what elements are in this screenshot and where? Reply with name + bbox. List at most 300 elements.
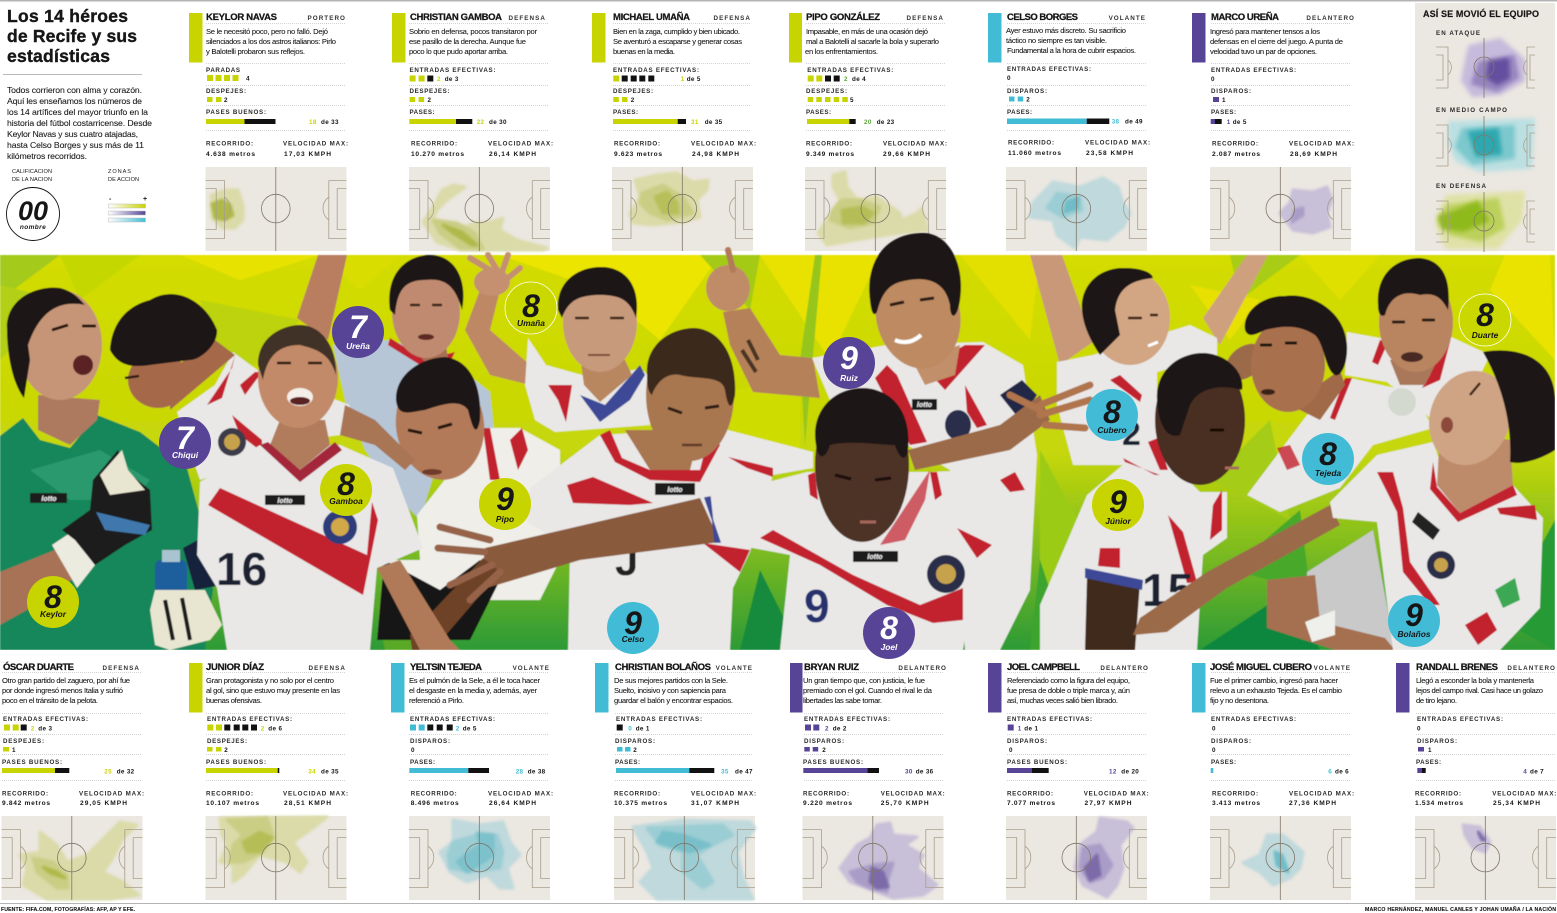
rating: Keylor 8: [27, 576, 79, 628]
panel: Joel Campbell: 27,97 KMPH: [1084, 800, 1132, 807]
white band below collage: [0, 650, 1557, 662]
rating: Duarte 8: [1459, 294, 1511, 346]
authors credit: MARCO HERNÁNDEZ, MANUEL CANLES Y JOHAN UMAÑA / LA NACIÓN: [1365, 905, 1556, 913]
player: Gamboa, number 16: lotto: [277, 498, 293, 505]
heat map: Keylor Navas: [206, 167, 346, 251]
panel: José Miguel Cubero: VELOCIDAD MAX:: [1289, 790, 1354, 798]
panel: Christian Gamboa: 2: [428, 97, 432, 104]
panel: Pipo González: 5: [850, 97, 854, 104]
panel: Christian Gamboa: CHRISTIAN GAMBOA: [410, 12, 502, 23]
panel: Randall Brenes: DELANTERO: [1507, 665, 1556, 672]
panel: Michael Umaña: 31: [691, 119, 699, 126]
legend: zonas de acción: ZONAS: [108, 169, 131, 175]
panel: Bryan Ruiz: 30: [905, 768, 913, 776]
panel: José Miguel Cubero: 0: [1212, 747, 1216, 754]
panel: Christian Bolaños: de 1: [636, 726, 650, 732]
panel: Bryan Ruiz: RECORRIDO:: [803, 790, 849, 798]
player: Umaña, raised arm: [465, 255, 650, 432]
panel: Bryan Ruiz: BRYAN RUIZ: [804, 662, 859, 673]
panel: Marco Ureña: DELANTERO: [1306, 15, 1355, 22]
panel: Óscar Duarte: ÓSCAR DUARTE: [3, 661, 74, 673]
legend: zonas de acción: -: [109, 196, 112, 203]
panel: Celso Borges: 0: [1007, 75, 1011, 82]
player: Gamboa, number 16: [197, 325, 460, 650]
panel: José Miguel Cubero: DISPAROS:: [1211, 738, 1251, 745]
panel: Randall Brenes: RANDALL BRENES: [1416, 662, 1498, 673]
heat map: José Miguel Cubero: [1210, 816, 1351, 900]
heat map: Junior Díaz: [206, 816, 346, 900]
rating: Chiqui 7: [159, 417, 211, 469]
panel: Michael Umaña: 2: [631, 97, 635, 104]
panel: Junior Díaz: 34: [308, 768, 316, 776]
panel: Michael Umaña: Se aventuró a escaparse y generar cosas: [613, 37, 742, 46]
heat map: Joel Campbell: [1006, 816, 1147, 900]
panel: Junior Díaz: RECORRIDO:: [206, 790, 253, 798]
panel: Celso Borges: 2: [1026, 96, 1030, 104]
panel: Randall Brenes: lejos del campo rival. Casi hace un golazo: [1416, 686, 1543, 695]
panel: Marco Ureña: velocidad tuvo un par de opciones.: [1210, 47, 1317, 56]
panel: Keylor Navas: de 33: [321, 119, 339, 126]
panel: Celso Borges: [988, 12, 1150, 251]
team map: en defensa: [1436, 183, 1535, 252]
panel: Michael Umaña: DEFENSA: [714, 15, 751, 22]
rating: Bolaños 9: 9: [1405, 597, 1423, 633]
intro text: hasta Celso Borges y sus más de 11: [7, 140, 144, 150]
panel: Keylor Navas: 18: [309, 119, 317, 126]
player: Keylor Navas, goalkeeper: [0, 288, 222, 650]
panel: Michael Umaña: 9.623 metros: [614, 151, 662, 158]
player: Bolaños, black bandana: [1133, 350, 1555, 650]
panel: Junior Díaz: PASES BUENOS:: [206, 759, 266, 766]
panel: José Miguel Cubero: RECORRIDO:: [1212, 790, 1258, 798]
panel: Randall Brenes: [1396, 662, 1556, 900]
player: Cubero, arms raised: [1030, 255, 1268, 465]
player: Gamboa, number 16: 16: [216, 543, 267, 595]
panel: Óscar Duarte: de 3: [38, 726, 52, 732]
panel: Celso Borges: VELOCIDAD MAX:: [1085, 140, 1150, 146]
panel: Celso Borges: VOLANTE: [1109, 15, 1146, 22]
panel: Christian Gamboa: RECORRIDO:: [411, 140, 457, 148]
heat map: Bryan Ruiz: [802, 816, 944, 900]
panel: Yeltsin Tejeda: 8.496 metros: [411, 800, 459, 807]
panel: Christian Gamboa: de 30: [489, 119, 507, 126]
player: Joel Campbell: 9: [804, 580, 830, 632]
team map: en ataque: EN ATAQUE: [1436, 30, 1480, 37]
panel: Randall Brenes: 25,34 KMPH: [1493, 800, 1540, 807]
panel: Michael Umaña: de 35: [705, 119, 723, 126]
panel: Yeltsin Tejeda: YELTSIN TEJEDA: [410, 662, 482, 673]
panel: Joel Campbell: 12: [1109, 768, 1117, 776]
panel: Joel Campbell: DISPAROS:: [1007, 738, 1047, 745]
panel: Junior Díaz: VELOCIDAD MAX:: [283, 790, 348, 798]
panel: Pipo González: de 4: [852, 76, 866, 83]
panel: Michael Umaña: Bien en la zaga, cumplido y bien ubicado.: [613, 27, 740, 36]
panel: Junior Díaz: 10.107 metros: [206, 800, 259, 807]
title: Los 14 héroes: [7, 6, 128, 26]
panel: José Miguel Cubero: VOLANTE: [1314, 665, 1351, 672]
rating: Ruiz 9: [823, 337, 875, 389]
panel: Óscar Duarte: PASES BUENOS:: [2, 759, 62, 766]
heat map: Marco Ureña: [1210, 167, 1351, 251]
panel: así se movió el equipo: [1415, 3, 1555, 252]
panel: Celso Borges: Ayer estuvo más discreto. Su sacrificio: [1006, 26, 1126, 35]
panel: Christian Gamboa: PASES:: [410, 109, 434, 116]
panel: Pipo González: ENTRADAS EFECTIVAS:: [807, 67, 893, 74]
panel: José Miguel Cubero: [1192, 662, 1354, 900]
panel: Christian Bolaños: [595, 662, 756, 900]
panel: Óscar Duarte: de 32: [117, 768, 135, 776]
panel: Junior Díaz: [189, 662, 348, 900]
player: Keylor Navas, goalkeeper: lotto: [41, 496, 57, 503]
panel: Christian Bolaños: de 47: [735, 768, 753, 776]
heat map: Celso Borges: [1006, 167, 1147, 251]
panel: Christian Gamboa: de 3: [445, 76, 459, 83]
panel: Joel Campbell: [988, 662, 1149, 900]
panel: Pipo González: VELOCIDAD MAX:: [883, 140, 947, 148]
panel: Junior Díaz: DESPEJES:: [207, 738, 247, 745]
panel: Keylor Navas: 4: [246, 76, 250, 82]
rating: Tejeda 8: Tejeda: [1315, 468, 1341, 478]
panel: Bryan Ruiz: 25,70 KMPH: [881, 800, 929, 807]
panel: Junior Díaz: DEFENSA: [309, 665, 346, 672]
panel: Bryan Ruiz: DISPAROS:: [804, 738, 844, 745]
panel: Michael Umaña: 24,98 KMPH: [692, 151, 739, 158]
rating: Keylor 8: 8: [44, 579, 62, 615]
panel: Yeltsin Tejeda: 0: [411, 747, 415, 754]
panel: Pipo González: 20: [864, 119, 872, 126]
panel: Keylor Navas: 4.638 metros: [206, 151, 255, 158]
panel: Christian Bolaños: 2: [633, 747, 637, 754]
rating: Celso 9: Celso: [622, 634, 644, 644]
panel: Christian Bolaños: 0: [628, 726, 632, 732]
panel: Keylor Navas: [189, 12, 348, 251]
player: Junior Díaz, number 15: 15: [1142, 564, 1193, 616]
panel: Marco Ureña: [1192, 12, 1355, 251]
rating: Júnior 9: Júnior: [1105, 516, 1132, 526]
heat map: Christian Gamboa: [409, 167, 550, 251]
panel: Celso Borges: ENTRADAS EFECTIVAS:: [1007, 66, 1091, 73]
rating: Cubero 8: 8: [1103, 394, 1121, 430]
panel: Joel Campbell: 1: [1018, 726, 1022, 732]
panel: Bryan Ruiz: ENTRADAS EFECTIVAS:: [804, 716, 890, 723]
player: Celso Borges: [527, 328, 813, 650]
panel: Óscar Duarte: ENTRADAS EFECTIVAS:: [3, 716, 88, 723]
legend: zonas de acción: DE ACCION: [108, 177, 139, 183]
rating: Ruiz 9: Ruiz: [840, 373, 859, 383]
panel: Randall Brenes: DISPAROS:: [1417, 738, 1457, 745]
panel: Celso Borges: DISPAROS:: [1007, 88, 1047, 95]
legend: calificación: CALIFICACION: [12, 169, 52, 175]
panel: José Miguel Cubero: fijo y no desentona.: [1210, 696, 1269, 705]
panel: Christian Gamboa: 10.270 metros: [411, 151, 464, 158]
panel: Junior Díaz: 28,51 KMPH: [284, 800, 331, 807]
player: Junior Díaz, number 15: [1040, 353, 1245, 650]
panel: Junior Díaz: de 6: [268, 726, 282, 732]
panel: Óscar Duarte: por donde ingresó menos Italia y sufrió: [2, 686, 123, 695]
source credit: FUENTE: FIFA.COM, FOTOGRAFÍAS: AFP, AP Y EFE.: [1, 905, 136, 913]
rating: Pipo 9: Pipo: [496, 514, 514, 524]
panel: Bryan Ruiz: de 36: [916, 768, 934, 776]
panel: Marco Ureña: 28,69 KMPH: [1290, 151, 1337, 158]
legend: calificación: DE LA NACION: [12, 177, 52, 183]
panel: Keylor Navas: DESPEJES:: [206, 88, 246, 95]
panel: Junior Díaz: de 35: [321, 768, 339, 776]
panel: Óscar Duarte: 1: [12, 747, 16, 754]
rating: Chiqui 7: Chiqui: [172, 450, 199, 460]
panel: Yeltsin Tejeda: referenció a Pirlo.: [409, 696, 464, 705]
panel: Junior Díaz: JUNIOR DÍAZ: [206, 662, 264, 673]
panel: Keylor Navas: 2: [224, 97, 228, 104]
panel: Joel Campbell: de 1: [1024, 726, 1038, 732]
panel: José Miguel Cubero: 0: [1212, 726, 1216, 732]
player: Ruiz: lotto: [917, 402, 933, 409]
panel: Michael Umaña: DESPEJES:: [613, 88, 653, 95]
panel: Randall Brenes: Llegó a esconder la bola y mantenerla: [1416, 676, 1535, 685]
panel: Celso Borges: 23,58 KMPH: [1086, 150, 1133, 157]
panel: Bryan Ruiz: PASES BUENOS:: [803, 759, 863, 766]
panel: Yeltsin Tejeda: VELOCIDAD MAX:: [488, 790, 553, 798]
player: Joel Campbell: [410, 385, 1090, 650]
panel: José Miguel Cubero: PASES:: [1211, 759, 1236, 766]
panel: Joel Campbell: VELOCIDAD MAX:: [1084, 790, 1149, 798]
panel: Yeltsin Tejeda: [391, 662, 553, 900]
panel: Bryan Ruiz: Un gran tiempo que, con justicia, le fue: [803, 676, 925, 685]
panel: Pipo González: 2: [844, 76, 848, 83]
intro text: kilómetros recorridos.: [7, 151, 87, 161]
legend: calificación: [6, 169, 60, 240]
panel: Marco Ureña: ENTRADAS EFECTIVAS:: [1211, 67, 1296, 74]
panel: Marco Ureña: PASES:: [1211, 109, 1236, 116]
panel: Keylor Navas: KEYLOR NAVAS: [206, 12, 277, 23]
panel: Michael Umaña: 1: [681, 76, 685, 83]
player: Chiqui, curly hair: [110, 294, 350, 480]
rating: Gamboa 8: Gamboa: [329, 496, 363, 506]
player: Ureña, behind: [297, 255, 495, 520]
panel: Junior Díaz: 2: [261, 726, 265, 732]
panel: Joel Campbell: DELANTERO: [1100, 665, 1149, 672]
rating: Celso 9: [607, 602, 659, 654]
rating: Bolaños 9: Bolaños: [1397, 629, 1431, 639]
panel: Christian Bolaños: 31,07 KMPH: [691, 800, 739, 807]
panel: Bryan Ruiz: libertades las sabe tomar.: [803, 696, 882, 705]
panel: Pipo González: [789, 12, 947, 251]
panel: Yeltsin Tejeda: ENTRADAS EFECTIVAS:: [410, 716, 495, 723]
panel: Keylor Navas: PARADAS: [206, 67, 240, 74]
panel: Christian Gamboa: ese pasillo de la derecha. Aunque fue: [409, 37, 526, 46]
panel: Marco Ureña: de 5: [1233, 119, 1247, 126]
panel: Randall Brenes: 4: [1523, 768, 1527, 776]
intro text: Keylor Navas y sus cuatro atajadas,: [7, 129, 138, 139]
panel: José Miguel Cubero: 27,36 KMPH: [1289, 800, 1336, 807]
panel: Marco Ureña: MARCO UREÑA: [1211, 12, 1279, 23]
panel: Marco Ureña: 2.087 metros: [1212, 151, 1260, 158]
panel: José Miguel Cubero: Fue el primer cambio, ingresó para hacer: [1210, 676, 1338, 685]
panel: José Miguel Cubero: ENTRADAS EFECTIVAS:: [1211, 716, 1296, 723]
panel: Christian Gamboa: 2: [437, 76, 441, 83]
intro text: Aquí les enseñamos los números de: [7, 96, 142, 106]
panel: Pipo González: DESPEJES:: [806, 88, 847, 95]
panel: Joel Campbell: Referenciado como la figura del equipo,: [1007, 676, 1130, 685]
rating: Pipo 9: [479, 478, 531, 530]
panel: Joel Campbell: ENTRADAS EFECTIVAS:: [1007, 716, 1092, 723]
panel: Christian Bolaños: ENTRADAS EFECTIVAS:: [616, 716, 702, 723]
panel: Michael Umaña: buenas en la media.: [613, 47, 675, 56]
panel: José Miguel Cubero: JOSÉ MIGUEL CUBERO: [1210, 662, 1312, 673]
panel: Christian Bolaños: guardar el balón y encontrar espacios.: [614, 696, 733, 705]
panel: Pipo González: PIPO GONZÁLEZ: [806, 12, 880, 23]
panel: Keylor Navas: 17,03 KMPH: [284, 151, 331, 158]
panel: Michael Umaña: VELOCIDAD MAX:: [691, 140, 756, 148]
heat map: Randall Brenes: [1415, 816, 1556, 900]
panel: Pipo González: de 23: [877, 119, 895, 126]
panel: Yeltsin Tejeda: PASES:: [410, 759, 435, 766]
rating: Júnior 9: 9: [1109, 484, 1127, 520]
player: Celso Borges: lotto: [667, 487, 683, 494]
panel: Yeltsin Tejeda: DISPAROS:: [410, 738, 450, 745]
panel: Michael Umaña: RECORRIDO:: [614, 140, 660, 148]
panel: Óscar Duarte: poco en el tránsito de la pelota.: [2, 696, 98, 705]
panel: Yeltsin Tejeda: 26,64 KMPH: [489, 800, 536, 807]
top rule: [0, 0, 1557, 2]
panel: Óscar Duarte: 9.842 metros: [2, 800, 50, 807]
panel: Bryan Ruiz: [790, 662, 947, 900]
panel: Marco Ureña: RECORRIDO:: [1212, 140, 1258, 148]
panel: Óscar Duarte: VELOCIDAD MAX:: [79, 790, 144, 798]
panel: Pipo González: DEFENSA: [907, 15, 944, 22]
player: Duarte: [1345, 258, 1490, 422]
panel: Bryan Ruiz: VELOCIDAD MAX:: [881, 790, 945, 798]
panel: Christian Gamboa: DEFENSA: [509, 15, 546, 22]
title: de Recife y sus: [7, 26, 137, 46]
rating: Umaña 8: [505, 282, 557, 334]
rating: Ureña 7: 7: [349, 309, 369, 345]
rating: Ureña 7: [332, 306, 384, 358]
panel: Michael Umaña: PASES:: [613, 109, 638, 116]
panel: Christian Gamboa: [392, 12, 553, 251]
panel: Joel Campbell: así, muchas veces salió bien librado.: [1007, 696, 1118, 705]
panel: Marco Ureña: 0: [1211, 76, 1215, 83]
legend: zonas de acción: +: [143, 196, 147, 203]
panel: Joel Campbell: JOEL CAMPBELL: [1007, 662, 1080, 673]
panel: Christian Bolaños: PASES:: [615, 759, 640, 766]
panel: Yeltsin Tejeda: de 5: [463, 726, 477, 732]
rating: Duarte 8: 8: [1476, 297, 1494, 333]
panel: así se movió el equipo: ASÍ SE MOVIÓ EL EQUIPO: [1423, 8, 1539, 19]
panel: Keylor Navas: PORTERO: [308, 15, 346, 22]
panel: Joel Campbell: PASES BUENOS:: [1007, 759, 1067, 766]
legend: calificación: nombre: [20, 224, 46, 231]
panel: Marco Ureña: DISPAROS:: [1211, 88, 1251, 95]
panel: José Miguel Cubero: 6: [1328, 768, 1332, 776]
panel: Marco Ureña: 1: [1222, 97, 1226, 104]
rating: Celso 9: 9: [624, 605, 642, 641]
panel: Yeltsin Tejeda: 2: [456, 726, 460, 732]
intro text: los 14 artífices del mayor triunfo en la: [7, 107, 148, 117]
panel: Michael Umaña: ENTRADAS EFECTIVAS:: [613, 67, 699, 74]
panel: Joel Campbell: RECORRIDO:: [1007, 790, 1053, 798]
rating: Bolaños 9: [1388, 595, 1440, 647]
panel: Keylor Navas: RECORRIDO:: [206, 140, 253, 148]
intro text: [7, 85, 152, 161]
panel: Óscar Duarte: 25: [104, 768, 112, 776]
panel: Keylor Navas: silenciados a los dos astros italianos: Pirlo: [206, 37, 336, 46]
rating: Tejeda 8: 8: [1319, 436, 1337, 472]
panel: Yeltsin Tejeda: RECORRIDO:: [411, 790, 457, 798]
rating: Umaña 8: Umaña: [517, 318, 545, 328]
background: low-poly green and yellow: [0, 255, 1555, 650]
rating: Gamboa 8: 8: [337, 466, 355, 502]
rating: Cubero 8: [1086, 389, 1138, 441]
panel: Randall Brenes: ENTRADAS EFECTIVAS:: [1417, 716, 1503, 723]
panel: Bryan Ruiz: DELANTERO: [898, 665, 947, 672]
panel: Randall Brenes: 1: [1428, 747, 1432, 754]
panel: Randall Brenes: RECORRIDO:: [1415, 790, 1461, 798]
panel: Pipo González: Impasable, en más de una ocasión dejó: [806, 27, 928, 36]
player: Tejeda: [1219, 295, 1433, 650]
legend: calificación: 00: [18, 196, 48, 226]
panel: Bryan Ruiz: 9.220 metros: [803, 800, 852, 807]
panel: Pipo González: 9.349 metros: [806, 151, 854, 158]
panel: Celso Borges: 38: [1112, 118, 1120, 126]
panel: Óscar Duarte: RECORRIDO:: [2, 790, 48, 798]
intro text: historia del fútbol costarricense. Desde: [7, 118, 152, 128]
panel: Joel Campbell: 0: [1009, 747, 1013, 754]
panel: Celso Borges: Fundamental a la hora de cubrir espacios.: [1007, 46, 1136, 55]
panel: Marco Ureña: VELOCIDAD MAX:: [1289, 140, 1354, 148]
panel: Christian Gamboa: ENTRADAS EFECTIVAS:: [410, 67, 496, 74]
panel: Pipo González: mal a Balotelli al sacarle la bola y superarlo: [806, 37, 939, 46]
legend: zonas de acción: [108, 169, 147, 222]
rating: Keylor 8: Keylor: [40, 609, 67, 619]
panel: Christian Gamboa: 22: [477, 119, 485, 126]
panel: Keylor Navas: VELOCIDAD MAX:: [283, 140, 348, 148]
heat map: Michael Umaña: [612, 167, 753, 251]
player: Joel Campbell: lotto: [867, 554, 883, 561]
panel: Junior Díaz: al gol, sino que estuvo muy presente en las: [206, 686, 340, 695]
heat map: Pipo González: [805, 167, 946, 251]
panel: Pipo González: 29,66 KMPH: [883, 151, 930, 158]
panel: Christian Bolaños: 10.375 metros: [614, 800, 667, 807]
panel: Pipo González: RECORRIDO:: [806, 140, 852, 148]
panel: Marco Ureña: Ingresó para mantener tensos a los: [1210, 27, 1320, 36]
panel: Joel Campbell: fue presa de doble o triple marca y, aún: [1007, 686, 1130, 695]
rating: Joel 8: Joel: [881, 642, 898, 652]
bottom rule: [0, 903, 1557, 904]
panel: Christian Bolaños: RECORRIDO:: [614, 790, 660, 798]
panel: Michael Umaña: de 5: [687, 76, 701, 83]
rating: Pipo 9: 9: [496, 481, 514, 517]
panel: Celso Borges: de 49: [1125, 118, 1143, 126]
rating: Tejeda 8: [1302, 433, 1354, 485]
team map: en medio campo: EN MEDIO CAMPO: [1436, 107, 1507, 114]
title: [7, 6, 137, 66]
panel: intro: [3, 6, 152, 240]
panel: Keylor Navas: Se le necesitó poco, pero no falló. Dejó: [206, 27, 328, 36]
panel: Randall Brenes: PASES:: [1416, 759, 1441, 766]
panel: Randall Brenes: de 7: [1530, 768, 1544, 776]
player: Celso Borges: J: [615, 537, 638, 584]
team map: en defensa: EN DEFENSA: [1436, 183, 1487, 190]
panel: Yeltsin Tejeda: el desgaste en la media y, además, ayer: [409, 686, 537, 695]
rating: Gamboa 8: [320, 464, 372, 516]
panel: Michael Umaña: [592, 12, 756, 251]
panel: Junior Díaz: ENTRADAS EFECTIVAS:: [207, 716, 292, 723]
team map: en ataque: [1436, 30, 1535, 98]
panel: Keylor Navas: y Balotelli probaron sus reflejos.: [206, 47, 305, 56]
panel: Christian Bolaños: Suelto, incisivo y con sapiencia para: [614, 686, 727, 695]
panel: José Miguel Cubero: de 6: [1335, 768, 1349, 776]
panel: Óscar Duarte: 2: [31, 726, 35, 732]
